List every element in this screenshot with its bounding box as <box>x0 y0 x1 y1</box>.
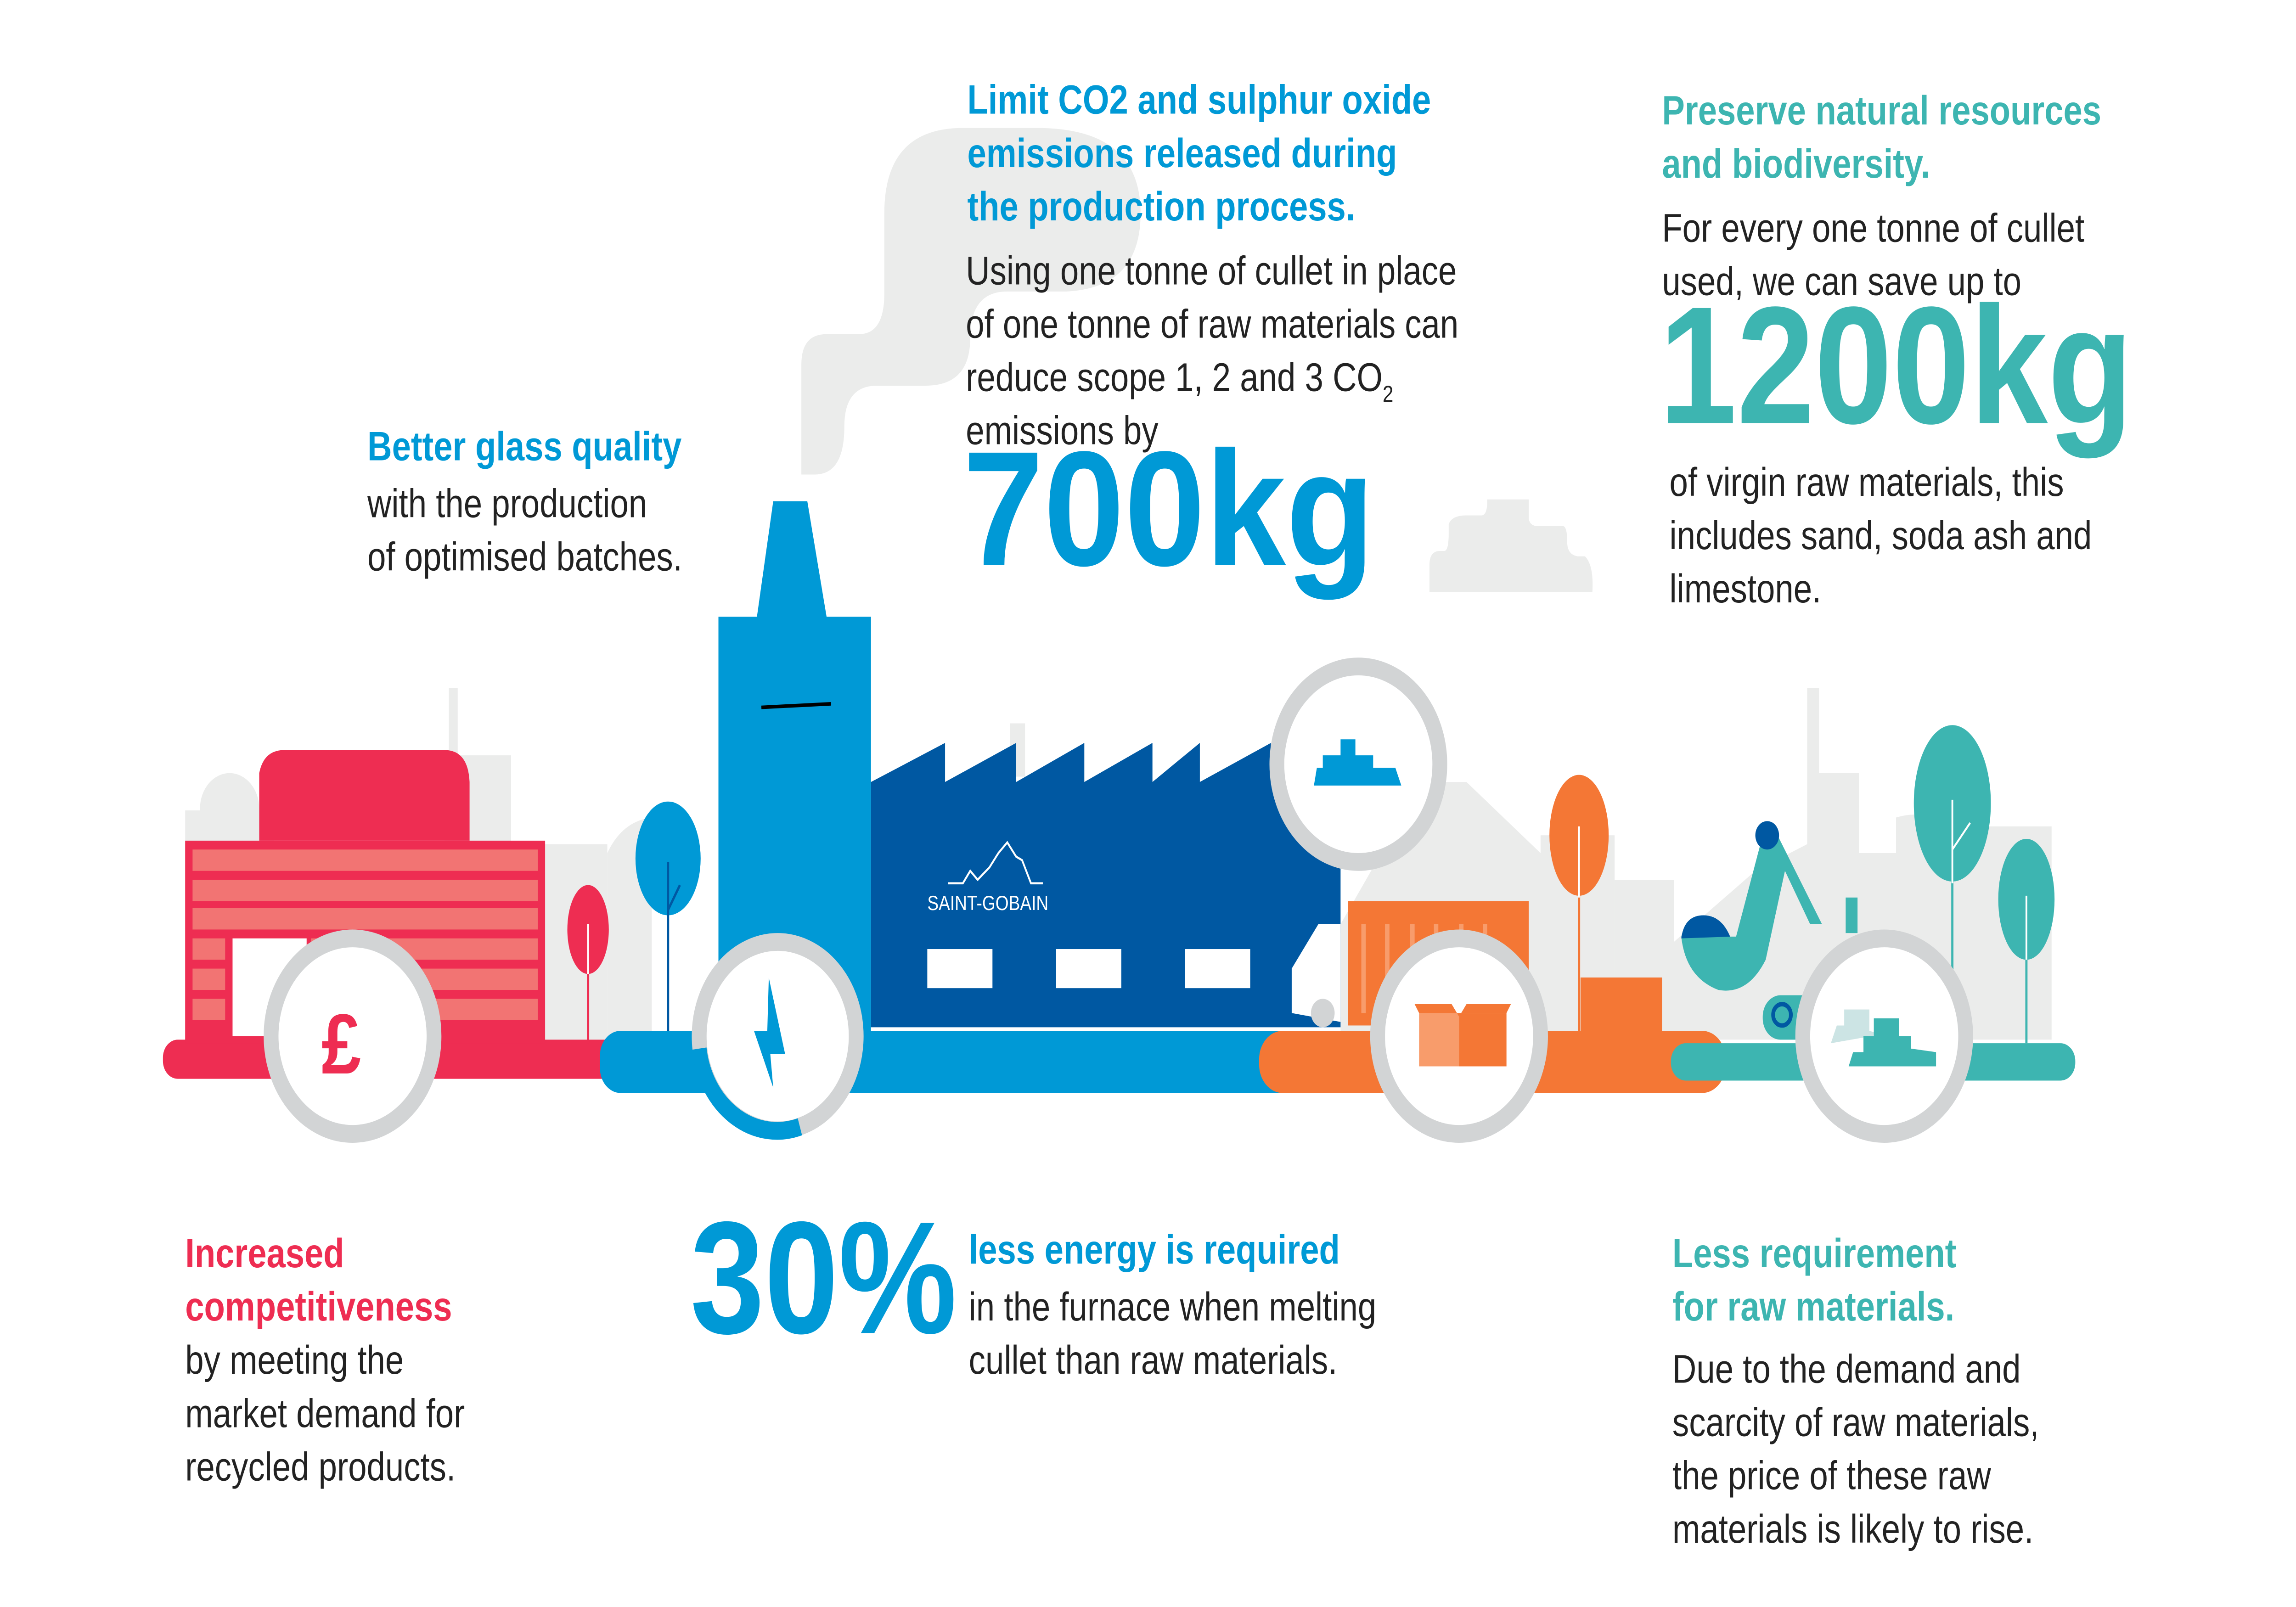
text: preserve natural resources: includes sand, soda ash and <box>1669 513 2092 558</box>
text: less requirement: materials is likely to rise. <box>1672 1506 2033 1551</box>
text: preserve natural resources: limestone. <box>1669 566 1821 611</box>
circle: pound: £ <box>321 997 361 1092</box>
text: limit CO2: Limit CO2 and sulphur oxide <box>967 77 1431 123</box>
text: 30% less energy: in the furnace when melting <box>969 1284 1376 1329</box>
text: 30% less energy: less energy is required <box>969 1227 1340 1273</box>
factory with sawtooth roof <box>871 743 1340 1027</box>
text: less requirement <box>1672 1231 2039 1551</box>
blue conveyor bar <box>600 1031 1304 1093</box>
chimney tower <box>719 501 871 1031</box>
teal conveyor bar <box>1671 1043 2075 1080</box>
text: preserve natural resources: 1200kg <box>1659 272 2133 460</box>
logo: SAINT-GOBAIN <box>927 892 1048 915</box>
text: limit CO2: of one tonne of raw materials can <box>966 301 1458 346</box>
text: 30% less energy <box>690 1188 1376 1382</box>
text: 30% less energy: cullet than raw materials. <box>969 1337 1337 1382</box>
excavator <box>1681 821 1857 1039</box>
text: preserve natural resources <box>1659 88 2133 611</box>
text: less requirement: Less requirement <box>1672 1231 1956 1276</box>
smoke from chimney <box>801 128 1141 475</box>
text: limit CO2: emissions released during <box>967 131 1397 176</box>
text: increased competitiveness: by meeting the <box>185 1337 404 1382</box>
text: less requirement: scarcity of raw materials, <box>1672 1399 2039 1444</box>
text: increased competitiveness: market demand for <box>185 1391 465 1436</box>
text: limit CO2: the production process. <box>967 184 1355 230</box>
text: limit CO2: emissions by <box>966 408 1159 453</box>
text: increased competitiveness: competitiveness <box>185 1284 452 1330</box>
text: preserve natural resources: used, we can save up to <box>1662 258 2021 303</box>
blue tree <box>636 802 701 1034</box>
text: better glass quality: of optimised batches. <box>367 534 682 579</box>
text: preserve natural resources: For every one tonne of cullet <box>1662 205 2084 250</box>
text: better glass quality: with the production <box>367 481 647 526</box>
text: less requirement: the price of these raw <box>1672 1453 1992 1498</box>
orange conveyor bar <box>1259 1031 1726 1093</box>
text: increased competitiveness <box>185 1231 465 1489</box>
background city silhouettes <box>185 688 2052 1041</box>
text: limit CO2 <box>963 77 1458 601</box>
text: less requirement: for raw materials. <box>1672 1284 1954 1330</box>
text: limit CO2: 2 <box>1383 381 1393 407</box>
red building <box>163 750 622 1079</box>
cloud <box>1429 500 1593 592</box>
circle: box <box>1378 938 1541 1134</box>
text: less requirement: Due to the demand and <box>1672 1346 2020 1391</box>
red tree <box>567 885 609 1043</box>
teal trees <box>1914 725 2054 1043</box>
logo <box>927 843 1048 915</box>
circle: cullet top <box>1277 667 1440 862</box>
text: better glass quality <box>367 424 682 579</box>
text: increased competitiveness: Increased <box>185 1231 344 1276</box>
text: limit CO2: Using one tonne of cullet in place <box>966 248 1457 293</box>
truck <box>1292 901 1662 1031</box>
circle: pound <box>271 938 434 1134</box>
circle: raw materials <box>1803 938 1966 1134</box>
text: preserve natural resources: and biodiversity. <box>1662 141 1930 187</box>
text: preserve natural resources: Preserve natural resources <box>1662 88 2101 134</box>
text: 30% less energy: 30% <box>690 1188 957 1367</box>
text: increased competitiveness: recycled products. <box>185 1444 456 1489</box>
text: limit CO2: 700kg <box>963 417 1375 601</box>
text: preserve natural resources: of virgin raw materials, this <box>1669 460 2064 504</box>
circle: energy bolt <box>699 942 856 1131</box>
text: better glass quality: Better glass quality <box>367 424 682 469</box>
text: limit CO2: reduce scope 1, 2 and 3 CO <box>966 354 1383 399</box>
orange tree <box>1549 775 1609 1031</box>
